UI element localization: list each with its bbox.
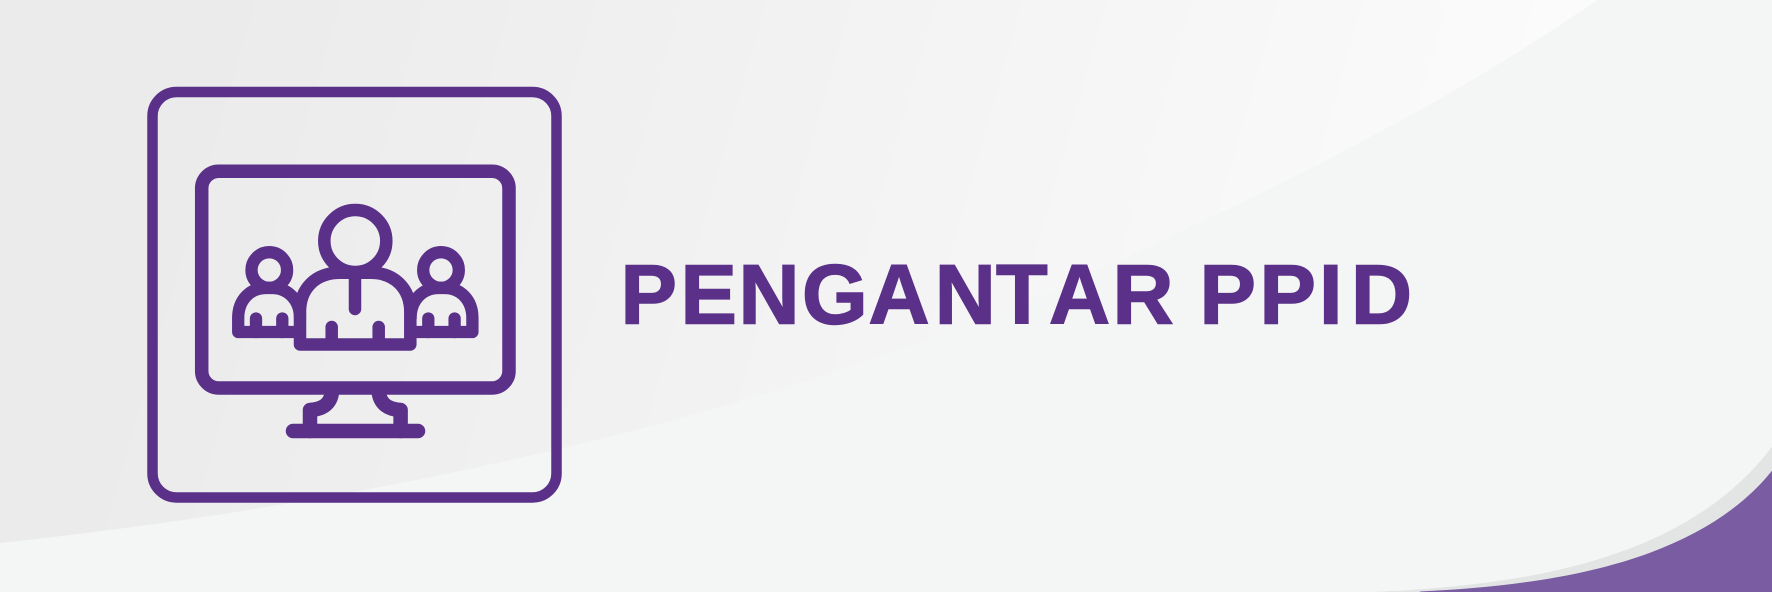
left person (238, 252, 300, 332)
icon: monitor with three people in a rounded frame (152, 92, 556, 498)
right person (411, 252, 472, 332)
monitor screen (202, 171, 509, 388)
grey corner curve (1373, 447, 1772, 592)
icon frame (152, 92, 556, 498)
purple corner curve (1420, 471, 1772, 592)
title: PENGANTAR PPID (620, 247, 1412, 341)
centre person (300, 210, 410, 344)
monitor stand (293, 392, 418, 431)
